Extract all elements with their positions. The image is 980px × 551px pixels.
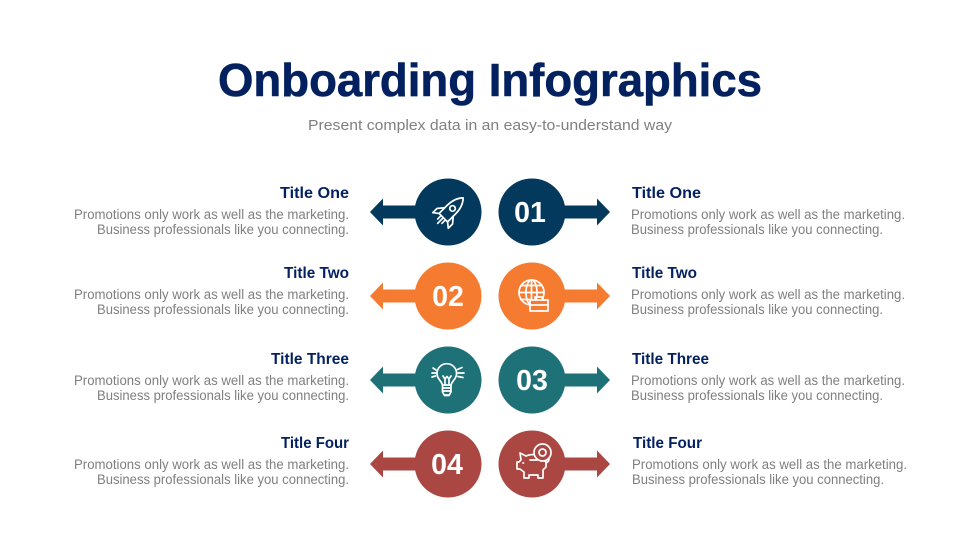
left node 3: lightbulb arrow	[370, 346, 482, 414]
right text block: title two: Business professionals like you connecting.	[631, 302, 883, 317]
right text block: title two	[631, 265, 905, 317]
icon: piggy bank with coin	[517, 444, 551, 478]
left text block: title two	[74, 265, 349, 317]
left text block: title one: Business professionals like you connecting.	[97, 222, 349, 237]
icon: rocket	[430, 190, 471, 231]
left text block: title four: Promotions only work as well as the marketing.	[74, 457, 349, 472]
right text block: title one: Business professionals like you connecting.	[631, 222, 883, 237]
number 04: 04	[431, 449, 463, 481]
right text block: title three: Title Three	[632, 351, 709, 368]
right text block: title four: Title Four	[633, 435, 702, 452]
right text block: title two: Promotions only work as well as the marketing.	[631, 287, 905, 302]
left text block: title three: Title Three	[271, 351, 349, 368]
right node 1: number arrow	[498, 178, 610, 246]
number 03: 03	[516, 365, 548, 397]
right text block: title one: Promotions only work as well as the marketing.	[631, 207, 905, 222]
right text block: title four: Business professionals like you connecting.	[632, 472, 884, 487]
left text block: title four: Business professionals like you connecting.	[97, 472, 349, 487]
left node 1: rocket arrow	[370, 178, 482, 246]
icon: lightbulb	[432, 364, 464, 396]
left text block: title four	[74, 435, 349, 487]
left text block: title one	[74, 185, 349, 237]
icon: globe with briefcase	[519, 280, 548, 311]
left node 4: number arrow	[370, 430, 482, 498]
right text block: title one: Title One	[632, 185, 701, 202]
title: Onboarding Infographics	[218, 54, 762, 106]
left text block: title three	[74, 351, 349, 403]
right text block: title four: Promotions only work as well as the marketing.	[632, 457, 907, 472]
right node 3: number arrow	[498, 346, 610, 414]
right text block: title three: Business professionals like you connecting.	[631, 388, 883, 403]
left text block: title two: Business professionals like you connecting.	[97, 302, 349, 317]
left text block: title four: Title Four	[281, 435, 349, 452]
subtitle: Present complex data in an easy-to-understand way	[308, 118, 673, 134]
right text block: title four	[632, 435, 907, 487]
left text block: title three: Promotions only work as well as the marketing.	[74, 373, 349, 388]
right node 2: globe arrow	[498, 262, 610, 330]
number 02: 02	[432, 281, 464, 313]
left text block: title one: Promotions only work as well as the marketing.	[74, 207, 349, 222]
right text block: title one	[631, 185, 905, 237]
right text block: title three	[631, 351, 905, 403]
right node 4: piggy bank arrow	[498, 430, 610, 498]
left node 2: number arrow	[370, 262, 482, 330]
left text block: title three: Business professionals like you connecting.	[97, 388, 349, 403]
left text block: title one: Title One	[280, 185, 349, 202]
number 01: 01	[514, 197, 546, 229]
right text block: title two: Title Two	[632, 265, 697, 282]
left text block: title two: Promotions only work as well as the marketing.	[74, 287, 349, 302]
left text block: title two: Title Two	[284, 265, 349, 282]
right text block: title three: Promotions only work as well as the marketing.	[631, 373, 905, 388]
